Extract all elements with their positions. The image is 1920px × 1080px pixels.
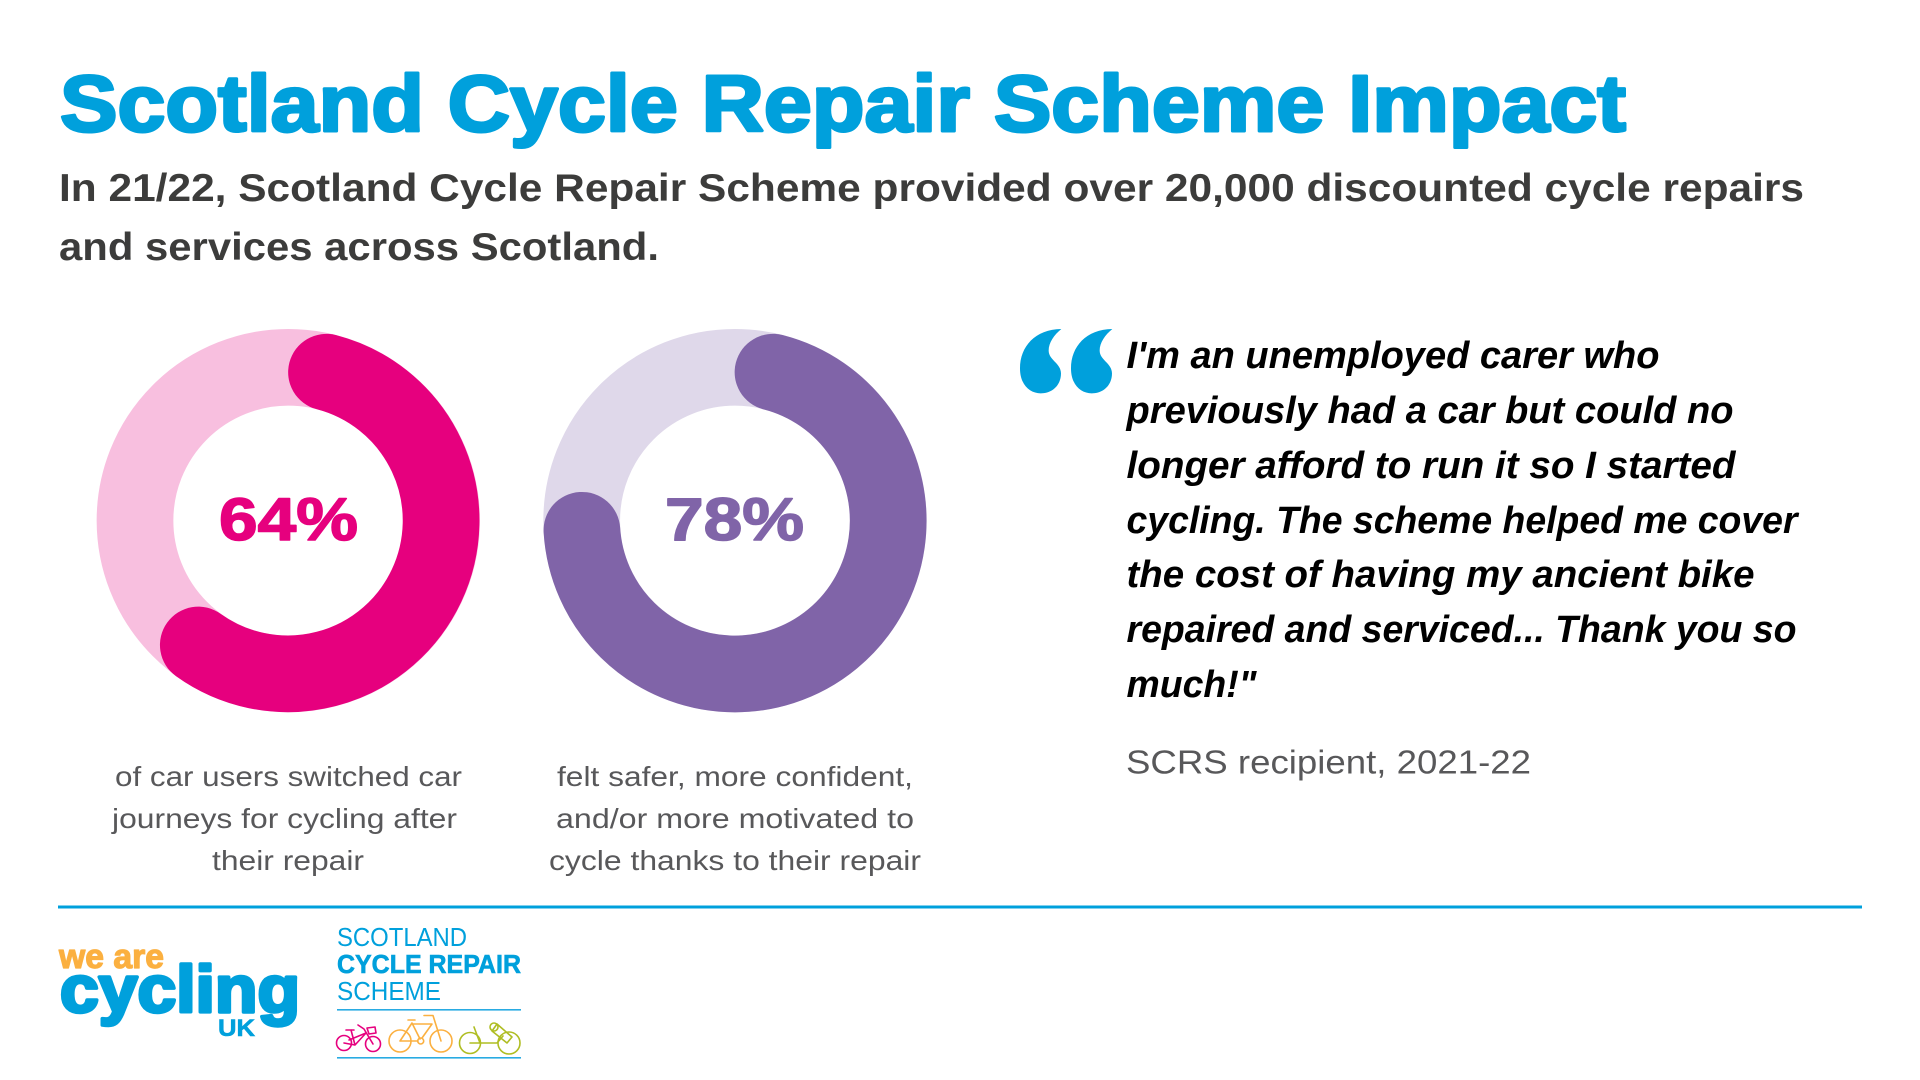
caption: 78%: and/or more motivated to [556, 803, 914, 834]
caption: 64%: journeys for cycling after [111, 803, 457, 834]
caption: 64% [111, 761, 462, 876]
panel: 64% donut chart [135, 367, 442, 674]
icon: green recumbent bicycle [460, 1023, 520, 1054]
donut percentage: 64% [219, 486, 358, 553]
quote text: cycling. The scheme helped me cover [1126, 500, 1800, 542]
quote text: previously had a car but could no [1125, 390, 1734, 432]
logo text: scheme name [337, 922, 521, 1006]
logo: we are cycling UK [58, 938, 300, 1042]
icon: orange bicycle [389, 1016, 452, 1052]
logo text: scheme name: SCOTLAND [337, 922, 467, 952]
quote text: repaired and serviced... Thank you so [1126, 609, 1796, 651]
caption: 64%: their repair [212, 845, 364, 876]
divider line [58, 906, 1862, 908]
logo text: scheme name: SCHEME [337, 976, 441, 1006]
logo text: scheme name: CYCLE REPAIR [337, 951, 521, 979]
logo text: cycling: cycling [60, 952, 300, 1026]
subtitle [59, 167, 1804, 269]
caption: 78%: cycle thanks to their repair [549, 845, 921, 876]
quote text: I'm an unemployed carer who [1126, 335, 1660, 377]
subtitle: In 21/22, Scotland Cycle Repair Scheme provided over 20,000 discounted cycle repairs [59, 167, 1804, 210]
quote text: longer afford to run it so I started [1126, 445, 1736, 487]
logo: Scotland Cycle Repair Scheme [336, 922, 521, 1059]
icon: pink bicycle [336, 1025, 380, 1052]
panel: 78% donut chart [582, 367, 888, 674]
donut percentage: 78% [665, 486, 804, 553]
quote attribution: SCRS recipient, 2021-22 [1126, 744, 1531, 780]
caption: 78%: felt safer, more confident, [557, 761, 913, 792]
donut value arc [582, 372, 888, 674]
quote text: the cost of having my ancient bike [1126, 554, 1754, 596]
quote text [1125, 335, 1800, 706]
subtitle: and services across Scotland. [59, 226, 659, 269]
quote text: much!" [1126, 664, 1257, 706]
caption: 78% [549, 761, 921, 876]
title: Scotland Cycle Repair Scheme Impact [60, 59, 1626, 148]
icon: quotation mark [1020, 329, 1112, 393]
logo text: UK: UK [218, 1015, 256, 1042]
caption: 64%: of car users switched car [115, 761, 462, 792]
donut track [135, 367, 442, 674]
donut track [582, 367, 888, 674]
donut value arc [198, 372, 441, 674]
logo text: we are: we are [58, 938, 164, 976]
